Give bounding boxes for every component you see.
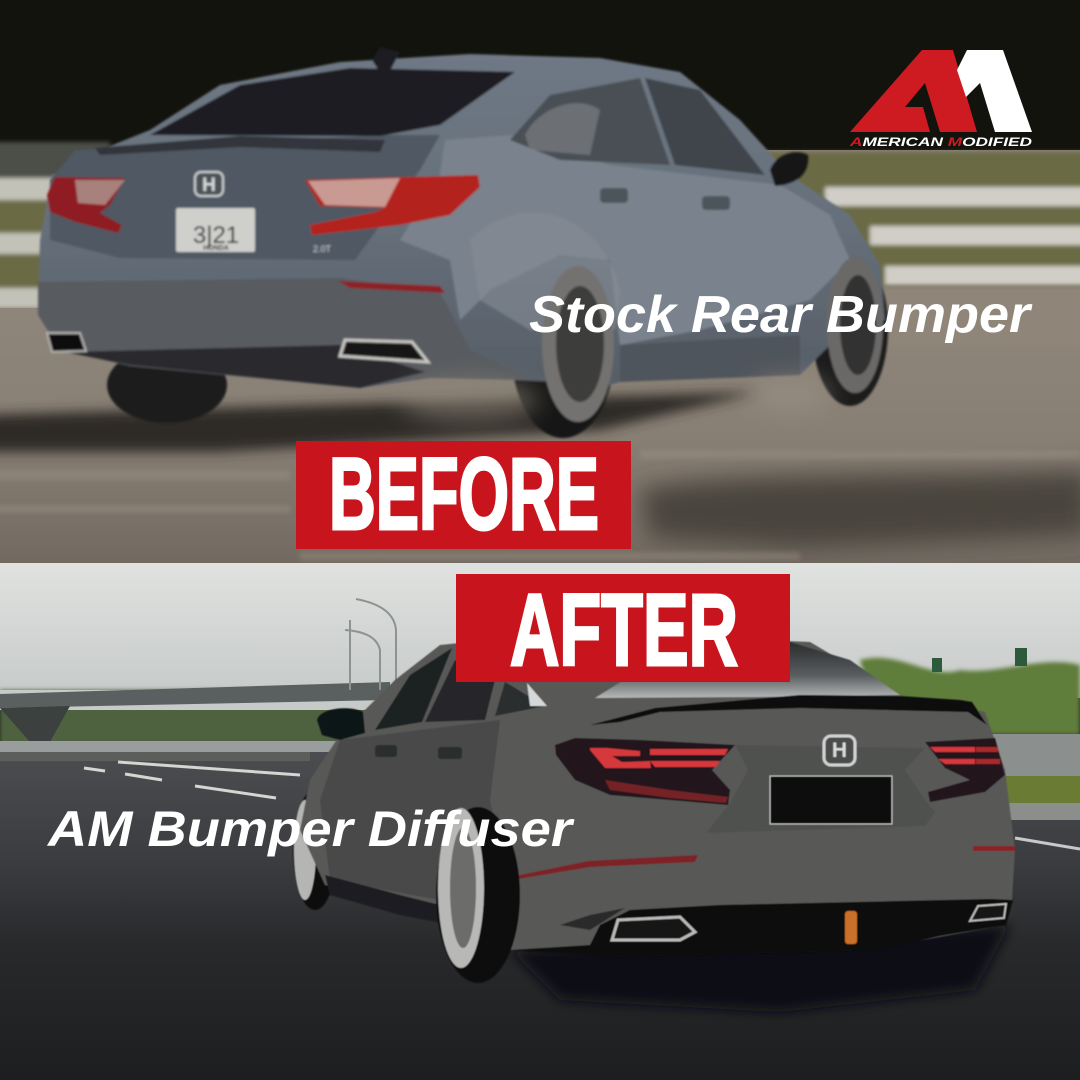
panel: after photo <box>0 563 1080 1016</box>
diffuser light <box>845 911 857 944</box>
logo M shape <box>957 50 1032 132</box>
panel: before photo <box>0 0 1080 568</box>
label: stock rear bumper: Stock Rear Bumper <box>529 286 1033 344</box>
car: stock: H <box>202 175 216 196</box>
car: stock: HONDA <box>203 245 229 252</box>
logo: American Modified <box>849 50 1032 149</box>
car: stock: 2.0T <box>313 244 332 254</box>
banner: before: BEFORE <box>329 437 599 551</box>
car: stock: 3|21 <box>193 222 239 249</box>
bumper reflectors <box>510 855 698 880</box>
left taillight <box>555 738 735 805</box>
banner: after: AFTER <box>510 573 738 687</box>
logo wordmark: A MERICAN M ODIFIED <box>849 137 1032 149</box>
trunk recess <box>706 745 935 833</box>
rear window <box>595 642 900 698</box>
honda badge <box>824 736 855 765</box>
diffuser <box>510 899 1013 957</box>
banner: before <box>296 437 631 551</box>
car: AM diffuser <box>293 635 1015 983</box>
car: AM diffuser: H <box>832 739 847 762</box>
right taillight <box>925 738 1005 802</box>
logo A shape <box>850 50 977 132</box>
black plate <box>770 776 892 824</box>
exhausts <box>612 917 695 940</box>
spoiler <box>590 695 987 725</box>
car: stock <box>38 47 888 438</box>
label: AM bumper diffuser: AM Bumper Diffuser <box>46 801 575 857</box>
